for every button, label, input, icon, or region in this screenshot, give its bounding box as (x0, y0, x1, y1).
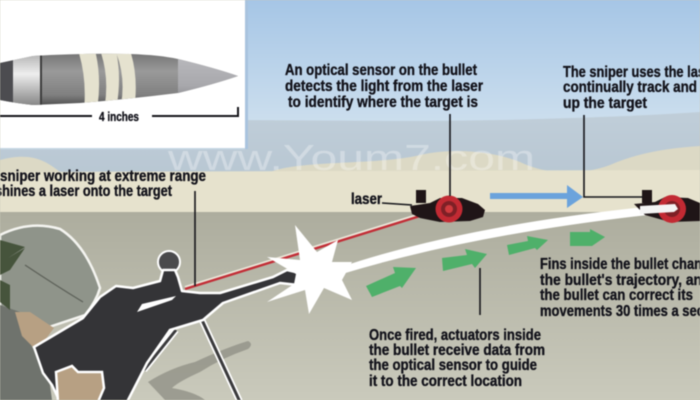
callout: sniper shines laser (0, 168, 206, 200)
green arrows: fin corrections (366, 229, 605, 297)
blue arrow: direction of tracking (490, 185, 583, 208)
callout: actuators (369, 327, 545, 390)
leader lines (195, 114, 643, 315)
callout: optical sensor: An optical sensor on the bullet (285, 62, 477, 79)
callout: sniper tracks target: up the target (563, 95, 647, 112)
callout: sniper tracks target (563, 64, 700, 112)
rifle shadow on the ground (148, 341, 251, 400)
panel: bullet illustration (0, 0, 248, 150)
callout: actuators: it to the correct location (369, 373, 522, 390)
callout: optical sensor: to identify where the target is (288, 94, 478, 111)
bullet tip at right target (640, 204, 678, 214)
soldier face and shoulder (0, 240, 54, 400)
rifle (34, 251, 300, 400)
bipod front leg (202, 320, 240, 400)
callout: optical sensor (285, 62, 483, 111)
scope highlight (137, 296, 176, 312)
watermark: www.Youm7.com (167, 137, 535, 178)
bipod rear leg (144, 330, 176, 370)
scope knob (158, 251, 180, 273)
target vehicle: left (410, 190, 485, 222)
callout: sniper shines laser: sniper working at extreme range (0, 168, 206, 185)
target vehicle: right (634, 190, 700, 223)
label: laser: laser (351, 191, 382, 208)
muzzle flash (267, 225, 352, 314)
callout: actuators: Once fired, actuators inside (369, 327, 541, 344)
soldier helmet (0, 226, 100, 330)
laser beam (185, 214, 420, 289)
callout: actuators: the optical sensor to guide (369, 357, 537, 374)
callout: actuators: the bullet receive data from (369, 342, 545, 359)
callout: sniper shines laser: shines a laser onto the target (0, 183, 172, 200)
callout: optical sensor: detects the light from the laser (285, 78, 483, 95)
dimension line (0, 107, 238, 124)
soldier hand (56, 366, 104, 400)
dimension label: 4 inches (99, 109, 139, 124)
bullet trajectory (338, 204, 675, 274)
callout: fins (540, 256, 700, 320)
icon: bullet (0, 53, 238, 106)
